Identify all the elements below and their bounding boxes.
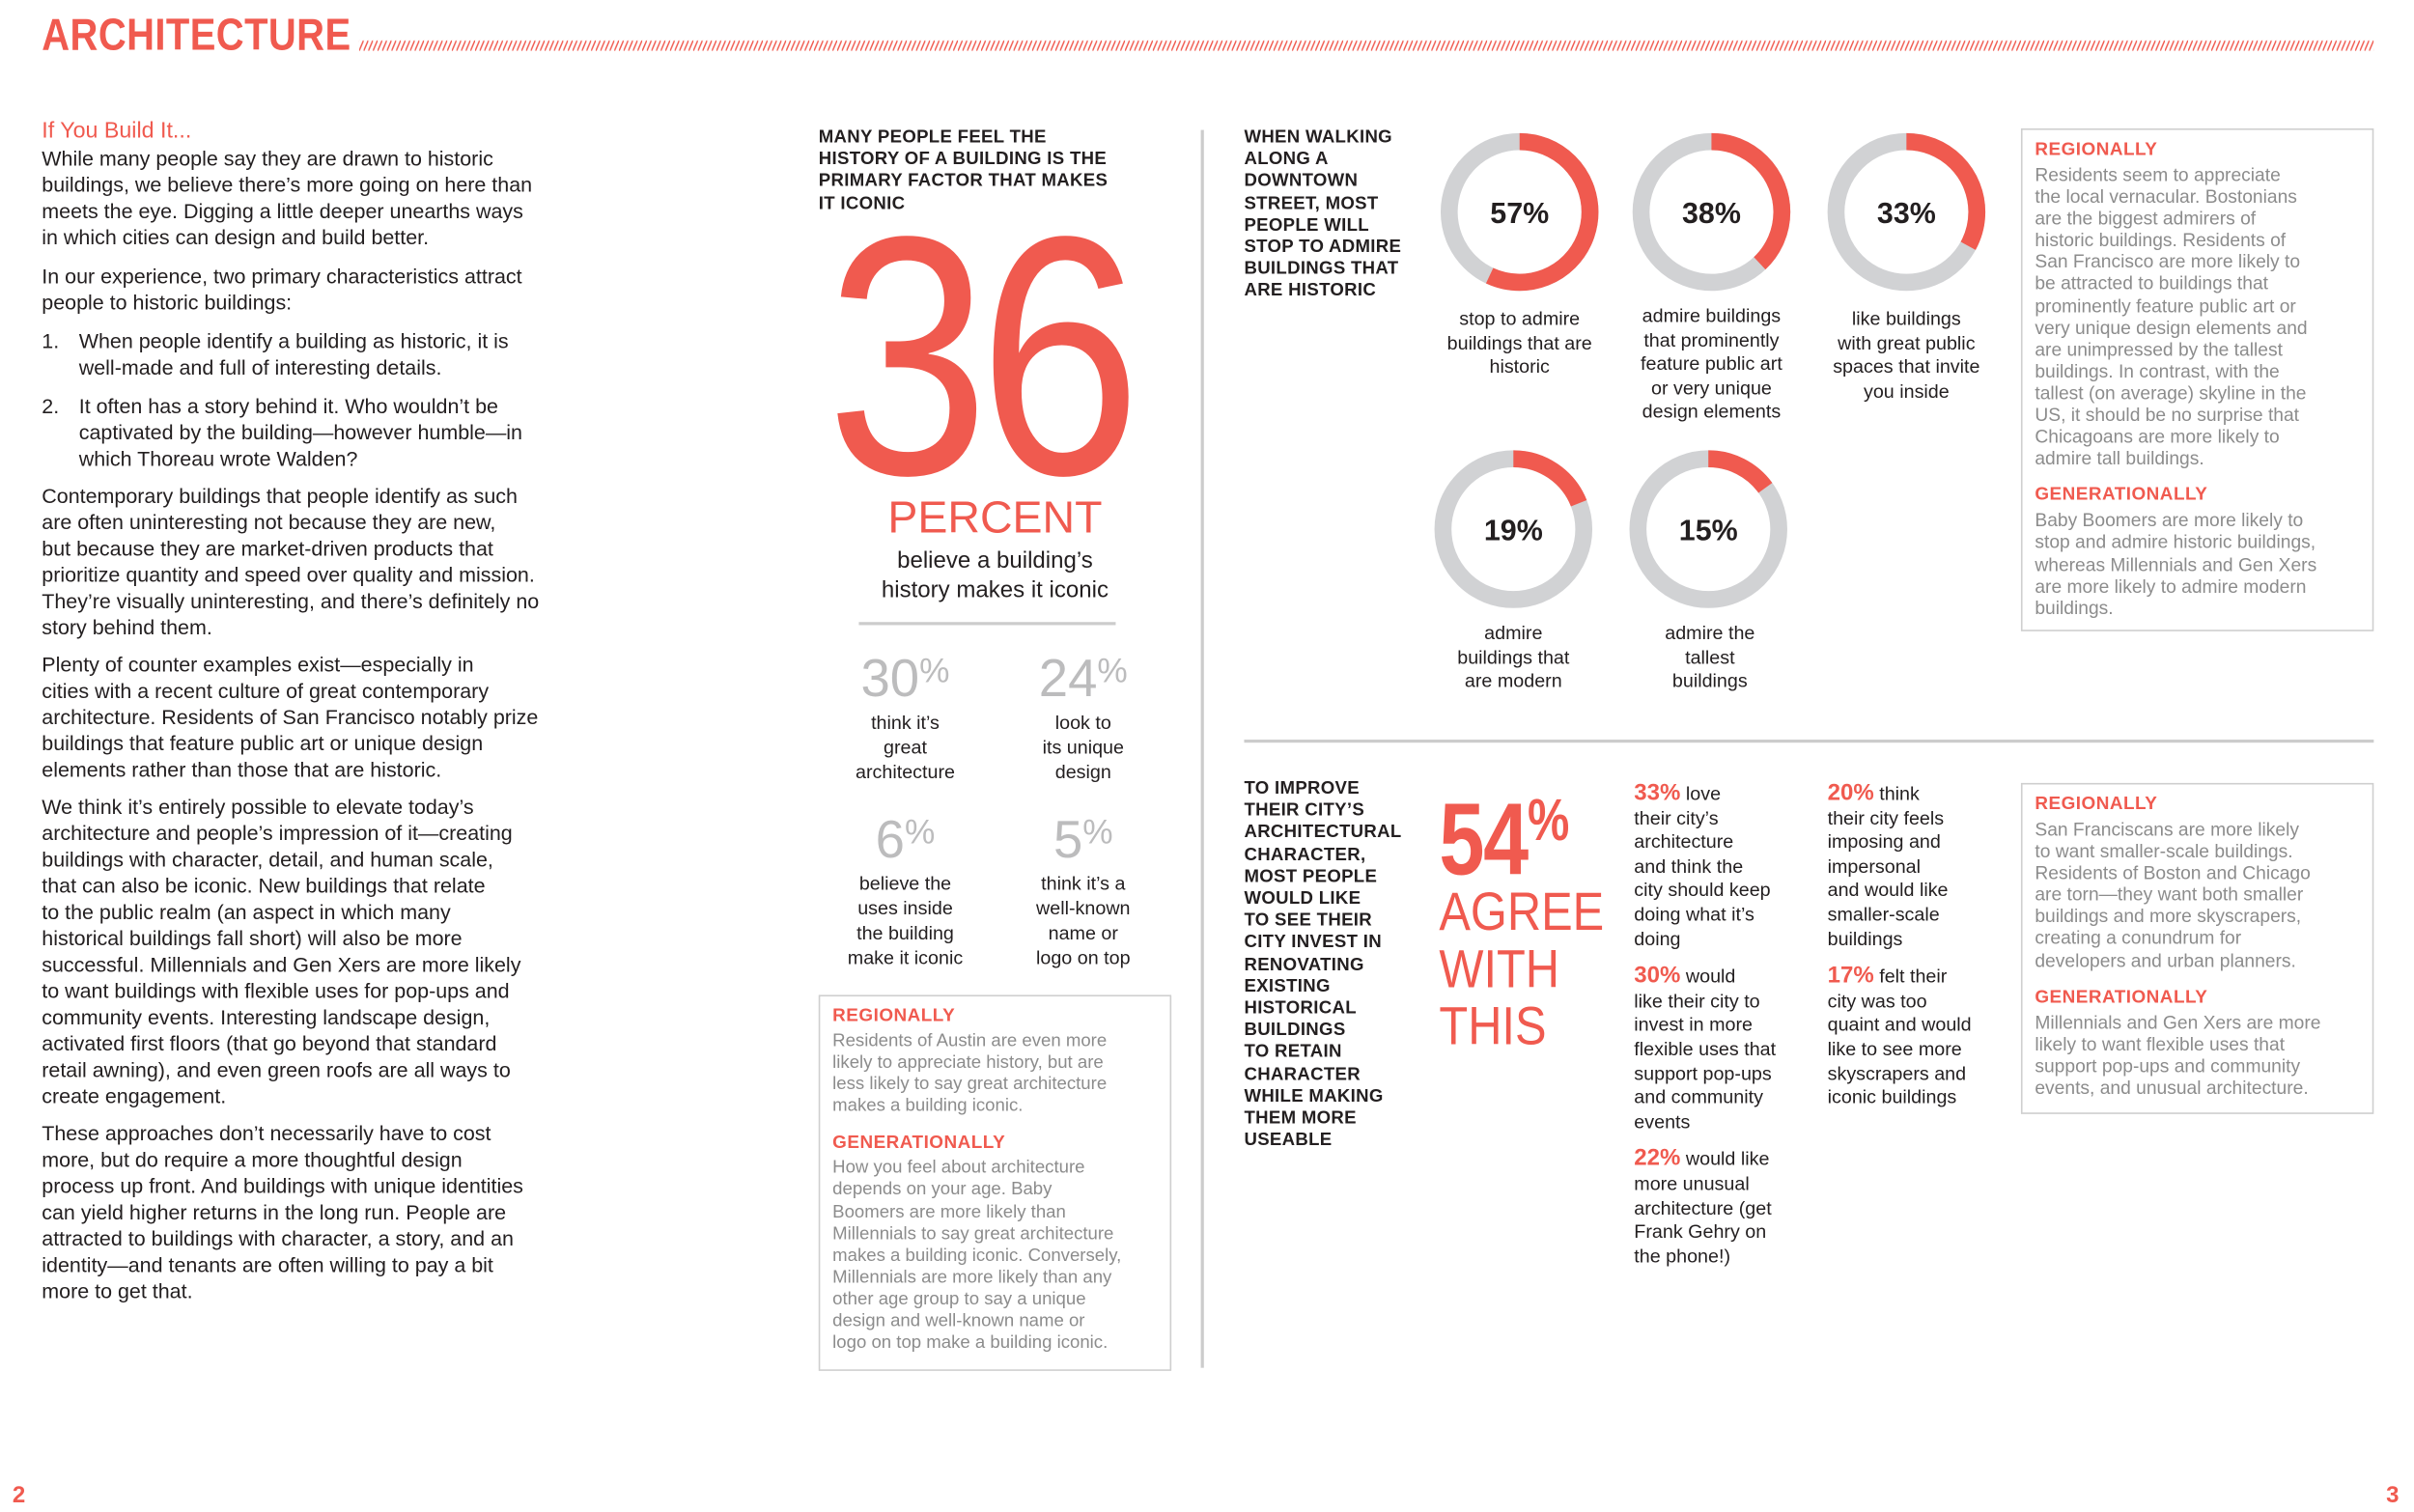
title: ARCHITECTURE [42, 11, 351, 60]
box: regional bottom right: developers and urban planners. [2035, 949, 2296, 971]
54% agree [1439, 781, 1604, 1057]
right heading bottom: MOST PEOPLE [1244, 866, 1377, 886]
column stats 1: and think the [1634, 855, 1743, 877]
left article: architecture and people’s impression of it—creating [42, 822, 513, 845]
box: regional top right: buildings. In contrast, with the [2035, 360, 2280, 382]
54% agree: 54% [1439, 781, 1568, 896]
middle heading: MANY PEOPLE FEEL THE [819, 126, 1047, 147]
stat 5: well-known [1036, 897, 1131, 919]
box: regional top right: Residents seem to appreciate [2035, 164, 2281, 185]
box: regional bottom right: buildings and more skyscrapers, [2035, 906, 2301, 928]
column stats 2: smaller-scale [1828, 904, 1940, 925]
left article: prioritize quantity and speed over quality and mission. [42, 563, 535, 586]
box: regional top right: very unique design elements and [2035, 317, 2308, 338]
text: are modern [1465, 670, 1562, 691]
left article: buildings, we believe there’s more going on here than [42, 173, 532, 197]
left article: create engagement. [42, 1084, 226, 1107]
middle heading: IT ICONIC [819, 193, 905, 213]
54% agree: WITH [1439, 939, 1559, 999]
left article: well-made and full of interesting details. [79, 356, 441, 379]
left article: Plenty of counter examples exist—especially in [42, 653, 474, 676]
right heading bottom: RENOVATING [1244, 954, 1364, 974]
box: regional bottom right: REGIONALLY [2035, 793, 2157, 814]
right heading top: DOWNTOWN [1244, 171, 1358, 191]
left article: buildings with character, detail, and human scale, [42, 848, 493, 871]
box: regional bottom right: San Franciscans are more likely [2035, 819, 2299, 840]
column stats 1: flexible uses that [1634, 1038, 1776, 1060]
box: regional middle: REGIONALLY [832, 1004, 955, 1025]
text: buildings that [1457, 646, 1569, 668]
stat 6: believe the [859, 873, 951, 894]
stat 30: architecture [856, 761, 955, 783]
left article: buildings that feature public art or unique design [42, 732, 483, 755]
box: regional middle [819, 994, 1171, 1371]
left article: We think it’s entirely possible to elevate today’s [42, 796, 474, 819]
stat 5: logo on top [1036, 947, 1131, 968]
right heading bottom [1244, 778, 1402, 1150]
column stats 1: more unusual [1634, 1173, 1750, 1194]
stat 24: design [1055, 761, 1111, 783]
column stats 1: 30% would [1634, 963, 1735, 989]
left article: are often uninteresting not because they are new, [42, 511, 495, 534]
box: regional bottom right: to want smaller-scale buildings. [2035, 840, 2293, 862]
donut charts: 33% [1877, 197, 1936, 230]
column stats 1: 33% love [1634, 780, 1721, 806]
left article: in which cities can design and build better. [42, 226, 429, 249]
left article: 1. [42, 329, 59, 352]
left article: but because they are market-driven products that [42, 537, 493, 560]
column stats 1: architecture (get [1634, 1197, 1772, 1218]
left article: Contemporary buildings that people identify as such [42, 485, 518, 508]
right heading bottom: THEIR CITY’S [1244, 800, 1364, 821]
right heading bottom: WHILE MAKING [1244, 1086, 1384, 1106]
right heading bottom: CITY INVEST IN [1244, 932, 1382, 952]
middle heading [819, 126, 1108, 213]
right heading top: PEOPLE WILL [1244, 214, 1369, 235]
column stats 2: iconic buildings [1828, 1086, 1956, 1108]
box: regional middle: design and well-known name or [832, 1310, 1084, 1330]
column stats 1: their city’s [1634, 807, 1719, 828]
box: regional middle: makes a building iconic. [832, 1096, 1023, 1116]
right heading bottom: TO SEE THEIR [1244, 910, 1372, 930]
column stats 1: 22% would like [1634, 1145, 1769, 1172]
box: regional middle: logo on top make a building iconic. [832, 1332, 1108, 1353]
column stats 1: support pop-ups [1634, 1062, 1772, 1084]
box: regional top right: tallest (on average) skyline in the [2035, 382, 2307, 404]
left article: If You Build It... [42, 119, 191, 144]
box: regional middle: less likely to say great architecture [832, 1074, 1107, 1094]
text: tallest [1685, 646, 1735, 668]
left article: to want buildings with flexible uses for pop-ups and [42, 979, 510, 1002]
box: regional bottom right: creating a conundrum for [2035, 928, 2241, 949]
box: regional top right [2021, 128, 2373, 631]
column stats 2: and would like [1828, 880, 1949, 901]
middle heading: HISTORY OF A BUILDING IS THE [819, 149, 1107, 169]
left article: process up front. And buildings with unique identities [42, 1174, 523, 1197]
donut charts: 57% [1490, 197, 1549, 230]
box: regional bottom right: are torn—they want both smaller [2035, 884, 2303, 906]
text: admire [1484, 622, 1542, 644]
column stats 1: events [1634, 1110, 1690, 1133]
column stats 1: invest in more [1634, 1014, 1753, 1036]
box: regional bottom right: support pop-ups and community [2035, 1055, 2300, 1077]
column stats 1: and community [1634, 1086, 1763, 1108]
box: regional bottom right: events, and unusual architecture. [2035, 1077, 2309, 1099]
left article: These approaches don’t necessarily have to cost [42, 1122, 491, 1145]
box: regional top right: San Francisco are more likely to [2035, 251, 2300, 273]
box: regional top right: are unimpressed by the tallest [2035, 339, 2283, 360]
right heading bottom: ARCHITECTURAL [1244, 823, 1402, 842]
text: buildings [1672, 670, 1748, 691]
box: regional top right: Chicagoans are more likely to [2035, 426, 2280, 447]
stat 30: great [884, 737, 927, 758]
stat 30: 30% [860, 650, 949, 709]
right heading top [1244, 126, 1401, 301]
box: regional top right: REGIONALLY [2035, 138, 2157, 159]
left article: While many people say they are drawn to historic [42, 147, 493, 170]
54% agree: AGREE [1439, 882, 1604, 942]
right heading bottom: TO IMPROVE [1244, 778, 1360, 798]
right heading bottom: CHARACTER, [1244, 844, 1366, 864]
left article: story behind them. [42, 616, 212, 639]
column stats 2: like to see more [1828, 1038, 1962, 1060]
text: or very unique [1651, 377, 1772, 399]
stat 30 [856, 650, 955, 783]
54% agree: THIS [1439, 996, 1547, 1057]
left article: It often has a story behind it. Who wouldn’t be [79, 395, 498, 418]
text: 3 [2386, 1482, 2400, 1508]
box: regional bottom right: Millennials and Gen Xers are more [2035, 1012, 2320, 1033]
column stats 1: Frank Gehry on [1634, 1221, 1766, 1243]
text: feature public art [1641, 352, 1782, 375]
left article: activated first floors (that go beyond that standard [42, 1032, 496, 1055]
right heading bottom: USEABLE [1244, 1130, 1333, 1150]
stat 5: name or [1049, 922, 1118, 944]
box: regional middle: Millennials are more likely than any [832, 1267, 1111, 1287]
box: regional top right: the local vernacular. Bostonians [2035, 185, 2297, 208]
left article: which Thoreau wrote Walden? [79, 447, 357, 470]
box: regional top right: buildings. [2035, 597, 2114, 619]
left article: architecture. Residents of San Francisco notably prize [42, 706, 538, 729]
left article: retail awning), and even green roofs are all ways to [42, 1058, 511, 1081]
left article: can yield higher returns in the long run. People are [42, 1201, 506, 1224]
stat 24 [1039, 650, 1128, 783]
caption [882, 547, 1109, 602]
box: regional bottom right: Residents of Boston and Chicago [2035, 862, 2311, 883]
caption: believe a building’s [897, 547, 1093, 574]
column stats 2: their city feels [1828, 807, 1944, 828]
right heading top: WHEN WALKING [1244, 126, 1392, 147]
box: regional middle: other age group to say a unique [832, 1289, 1086, 1309]
right heading bottom: WOULD LIKE [1244, 888, 1361, 909]
right heading bottom: BUILDINGS [1244, 1020, 1346, 1040]
left article: They’re visually uninteresting, and there’s definitely no [42, 590, 539, 613]
box: regional top right: GENERATIONALLY [2035, 483, 2207, 505]
left article [42, 119, 539, 1302]
text: admire the [1665, 622, 1754, 644]
column stats 1 [1634, 780, 1776, 1267]
left article: attracted to buildings with character, a story, and an [42, 1227, 514, 1250]
box: regional top right: stop and admire historic buildings, [2035, 531, 2316, 553]
box: regional top right: are more likely to admire modern [2035, 575, 2306, 597]
donut charts: 19% [1484, 514, 1543, 546]
right heading top: ALONG A [1244, 149, 1329, 169]
stat 24: look to [1055, 712, 1111, 734]
middle heading: PRIMARY FACTOR THAT MAKES [819, 171, 1108, 191]
stat 5: think it’s a [1041, 873, 1125, 894]
stat 6 [848, 811, 963, 968]
box: regional middle: Boomers are more likely than [832, 1201, 1066, 1221]
left article: elements rather than those that are historic. [42, 758, 441, 781]
box: regional top right: US, it should be no surprise that [2035, 404, 2299, 426]
box: regional middle: How you feel about architecture [832, 1158, 1084, 1178]
column stats 2: skyscrapers and [1828, 1062, 1966, 1084]
donut labels: buildings that are [1447, 332, 1592, 353]
box: regional bottom right: likely to want flexible uses that [2035, 1033, 2285, 1055]
stat 6: make it iconic [848, 947, 963, 968]
column stats 2: quaint and would [1828, 1014, 1972, 1036]
column stats 1: like their city to [1634, 990, 1760, 1012]
left article: meets the eye. Digging a little deeper unearths ways [42, 200, 523, 223]
stat 6: 6% [876, 811, 935, 870]
left article: to the public realm (an aspect in which many [42, 901, 451, 924]
box: regional top right: are the biggest admirers of [2035, 208, 2256, 229]
column stats 1: doing [1634, 928, 1681, 949]
box: regional top right: Baby Boomers are more likely to [2035, 510, 2303, 531]
box: regional top right: prominently feature public art or [2035, 294, 2296, 317]
right heading bottom: THEM MORE [1244, 1108, 1357, 1128]
big number 36: 36 [827, 165, 1131, 546]
left article: captivated by the building—however humble—in [79, 421, 522, 444]
caption: history makes it iconic [882, 576, 1109, 602]
box: regional top right: be attracted to buildings that [2035, 273, 2268, 294]
stat 6: the building [856, 922, 954, 944]
donut charts: 15% [1679, 514, 1738, 546]
box: regional bottom right [2021, 783, 2373, 1114]
left article: more, but do require a more thoughtful design [42, 1148, 463, 1171]
column stats 2: 17% felt their [1828, 963, 1947, 989]
right heading bottom: CHARACTER [1244, 1064, 1361, 1084]
right heading top: STREET, MOST [1244, 193, 1379, 213]
donut charts [1435, 133, 1985, 608]
left article: cities with a recent culture of great contemporary [42, 680, 489, 703]
box: regional middle: depends on your age. Baby [832, 1180, 1052, 1200]
donut labels: stop to admire [1459, 308, 1580, 329]
column stats 1: city should keep [1634, 880, 1771, 901]
right heading bottom: TO RETAIN [1244, 1042, 1342, 1062]
box: regional middle: Residents of Austin are even more [832, 1030, 1107, 1050]
text: with great public [1838, 332, 1976, 353]
left article: that can also be iconic. New buildings that relate [42, 874, 486, 897]
text: that prominently [1643, 329, 1780, 350]
left article: 2. [42, 395, 59, 418]
left article: When people identify a building as historic, it is [79, 329, 509, 352]
page numbers: 2 [13, 1482, 25, 1508]
right heading bottom: EXISTING [1244, 976, 1331, 996]
stat 24: its unique [1043, 737, 1124, 758]
column stats 1: the phone!) [1634, 1246, 1730, 1267]
text: like buildings [1852, 308, 1961, 329]
stat 30: think it’s [871, 712, 940, 734]
column stats 2: 20% think [1828, 780, 1920, 806]
left article: In our experience, two primary characteristics attract [42, 265, 522, 288]
column stats 2 [1827, 780, 1972, 1108]
text: you inside [1864, 379, 1950, 402]
right heading top: STOP TO ADMIRE [1244, 237, 1401, 257]
right heading top: BUILDINGS THAT [1244, 259, 1398, 279]
right heading bottom: HISTORICAL [1244, 998, 1357, 1019]
column stats 1: architecture [1634, 831, 1733, 853]
stat 6: uses inside [857, 897, 953, 919]
box: regional top right: whereas Millennials and Gen Xers [2035, 553, 2316, 574]
text: spaces that invite [1833, 356, 1979, 378]
stat 24: 24% [1039, 650, 1128, 709]
text: design elements [1642, 401, 1781, 422]
column stats 2: impersonal [1828, 855, 1921, 877]
donut labels: historic [1489, 356, 1550, 378]
column stats 1: doing what it’s [1634, 904, 1754, 925]
left article: identity—and tenants are often willing to pay a bit [42, 1253, 493, 1276]
left article: people to historic buildings: [42, 291, 292, 314]
box: regional middle: likely to appreciate history, but are [832, 1052, 1104, 1073]
box: regional top right: admire tall buildings. [2035, 447, 2204, 469]
right heading top: ARE HISTORIC [1244, 281, 1376, 301]
box: regional top right: historic buildings. Residents of [2035, 230, 2286, 251]
left article: more to get that. [42, 1279, 193, 1302]
donut charts: 38% [1682, 197, 1741, 230]
stat 5: 5% [1053, 811, 1113, 870]
left article: historical buildings fall short) will also be more [42, 927, 463, 950]
box: regional middle: makes a building iconic. Conversely, [832, 1246, 1121, 1265]
box: regional middle: GENERATIONALLY [832, 1132, 1005, 1154]
stat 5 [1036, 811, 1131, 968]
box: regional middle: Millennials to say great architecture [832, 1223, 1113, 1244]
text: admire buildings [1642, 305, 1781, 326]
donut labels [1447, 308, 1592, 378]
column stats 2: buildings [1828, 928, 1902, 949]
column stats 2: imposing and [1828, 831, 1941, 853]
column stats 2: city was too [1828, 990, 1927, 1012]
box: regional bottom right: GENERATIONALLY [2035, 985, 2207, 1007]
left article: successful. Millennials and Gen Xers are more likely [42, 953, 520, 976]
percent label: PERCENT [887, 493, 1102, 543]
left article: community events. Interesting landscape design, [42, 1006, 490, 1029]
